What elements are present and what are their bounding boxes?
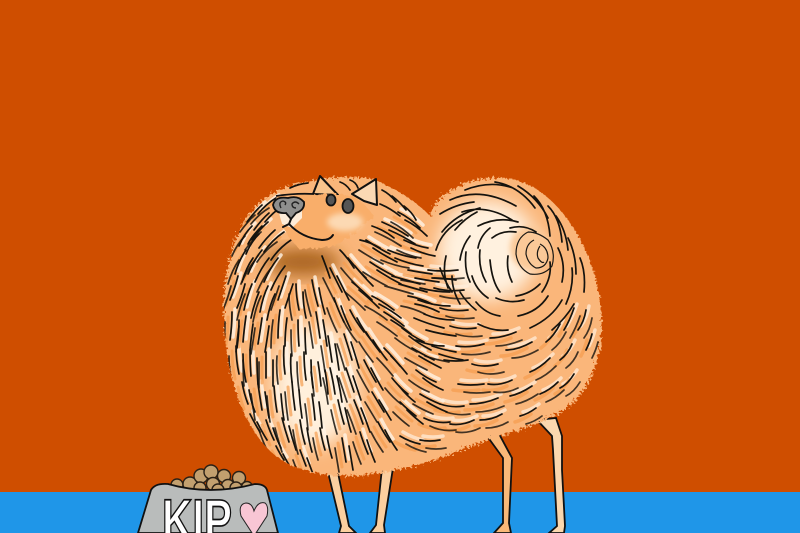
mouth line [283,219,333,240]
kibble pile [171,465,252,496]
bowl heart [240,503,268,533]
fur strokes: mane [223,198,598,476]
body silhouette [224,177,602,476]
dog: back right leg [537,418,565,533]
nose [273,197,304,219]
food bowl [138,465,278,533]
fur strokes: head top and junction [248,180,468,361]
bowl body [138,484,278,533]
fur strokes: tail curl [516,232,553,274]
face light patch [327,213,363,231]
dog: right ear [352,179,377,205]
dog: back left leg [487,432,512,533]
fur strokes: tail [436,182,584,330]
nostrils [280,201,299,208]
face fill [275,194,374,250]
dog: left ear [313,176,338,195]
fur streaks: orange [226,203,452,471]
eye right [342,199,354,213]
dog: face [273,194,374,250]
dog: front right leg [370,468,393,533]
dog: fluffy body [223,177,602,476]
dog: front left leg [327,468,356,533]
fur streaks: light [233,195,459,463]
fur colour patches [223,180,598,476]
top of muzzle line [276,194,314,196]
illustration: dog and bowl [0,175,800,533]
background: blue floor [0,492,800,533]
eye left [326,194,336,206]
muzzle highlight [276,202,302,228]
